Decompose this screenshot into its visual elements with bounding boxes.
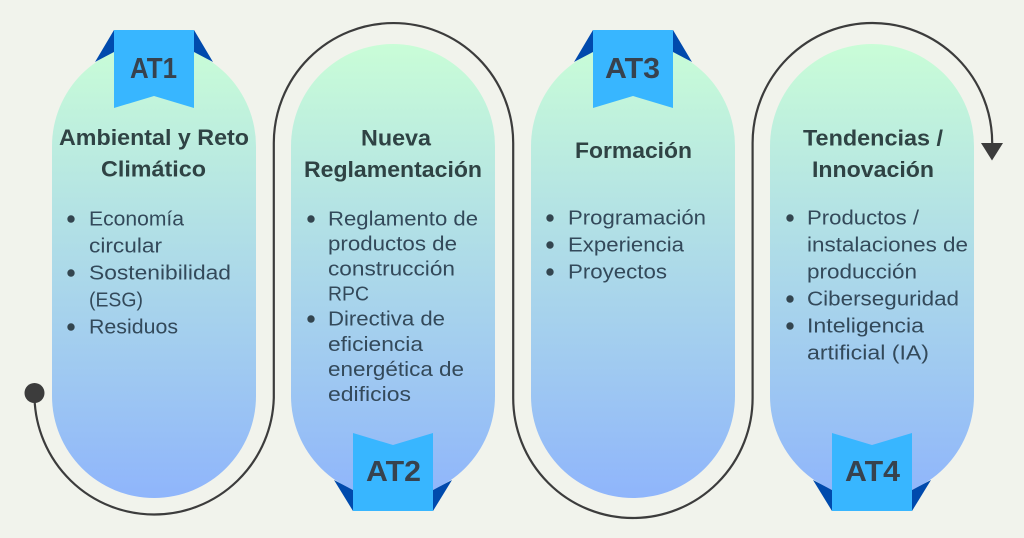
bullet list	[307, 208, 478, 406]
panel: AT4 Tendencias / Innovación	[770, 44, 974, 511]
ribbon: AT1	[95, 30, 213, 108]
heading	[803, 126, 944, 182]
bullet list: Economía	[89, 208, 185, 230]
bullet list: (ESG)	[89, 288, 143, 312]
start dot	[24, 383, 44, 403]
ribbon: AT3: AT3	[605, 53, 660, 85]
bullet list: Productos /	[807, 206, 919, 230]
bullet list: edificios	[328, 383, 411, 406]
bullet list: artificial (IA)	[807, 342, 929, 364]
heading	[59, 125, 249, 182]
ribbon: AT2: AT2	[366, 456, 421, 488]
bullet list: Inteligencia	[807, 314, 925, 338]
bullet list: circular	[89, 234, 162, 258]
bullet list: Residuos	[89, 316, 178, 338]
arrowhead	[981, 143, 1003, 160]
ribbon: AT4	[813, 433, 931, 511]
pill background	[52, 44, 256, 498]
ribbon: AT1: AT1	[130, 53, 177, 85]
bullet list: instalaciones de	[807, 234, 968, 256]
bullet list: eficiencia	[328, 333, 424, 356]
bullet list: Sostenibilidad	[89, 262, 231, 284]
heading: Reglamentación	[304, 157, 482, 182]
bullet list: Directiva de	[328, 308, 445, 330]
pill background	[291, 44, 495, 498]
bullet list: Programación	[568, 206, 706, 230]
panel: AT2 Nueva Reglamentación	[291, 44, 495, 511]
heading: Climático	[101, 156, 206, 182]
heading: Formación	[575, 138, 692, 163]
heading: Nueva	[361, 126, 431, 150]
bullet list	[546, 206, 706, 284]
bullet list: Experiencia	[568, 234, 685, 256]
ribbon: AT2	[334, 433, 452, 511]
pill background	[531, 44, 735, 498]
bullet list: energética de	[328, 358, 464, 381]
bullet list	[786, 206, 968, 364]
heading: Tendencias /	[803, 126, 944, 150]
bullet list: Ciberseguridad	[807, 288, 959, 310]
ribbon: AT4: AT4	[845, 456, 900, 488]
heading	[304, 126, 482, 182]
bullet list: construcción	[328, 258, 455, 280]
bullet list: Reglamento de	[328, 208, 478, 230]
pill background	[770, 44, 974, 498]
bullet list: Proyectos	[568, 260, 667, 284]
panel: AT3 Formación	[531, 30, 735, 498]
panel: AT1 Ambiental y Reto Climático	[52, 30, 256, 498]
bullet list: producción	[807, 260, 917, 284]
heading: Innovación	[812, 157, 934, 182]
bullet list: productos de	[328, 232, 457, 256]
heading: Ambiental y Reto	[59, 125, 249, 150]
ribbon: AT3	[574, 30, 692, 108]
bullet list: RPC	[328, 282, 369, 306]
bullet list	[67, 208, 231, 338]
